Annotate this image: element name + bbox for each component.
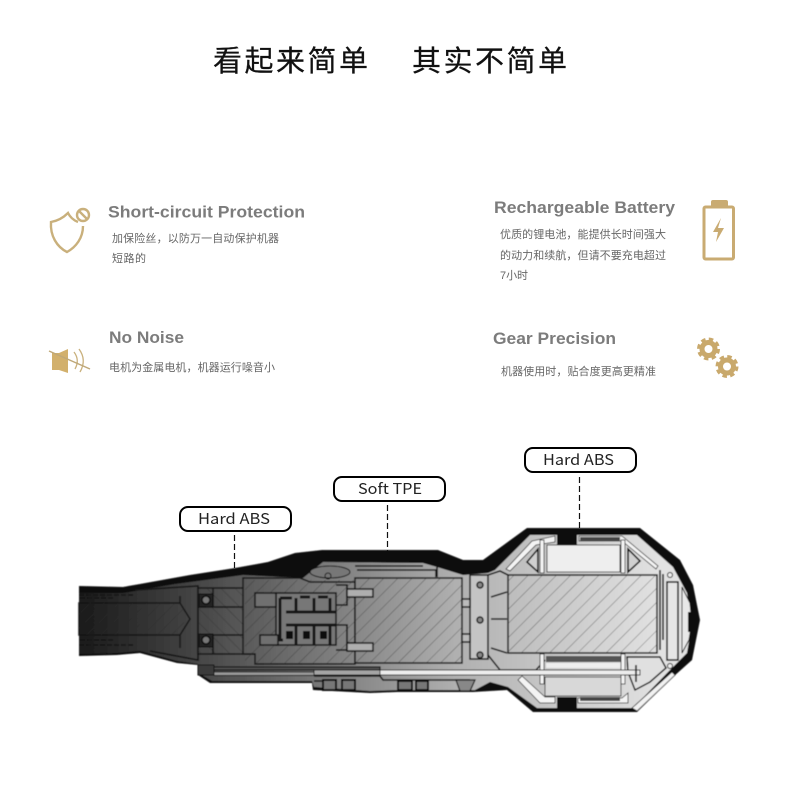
front shaft xyxy=(79,586,198,660)
heading: Rechargeable Battery xyxy=(494,198,676,217)
rear upper chamber xyxy=(506,535,658,573)
rear battery block xyxy=(508,575,657,653)
callout: hard ABS front: Hard ABS xyxy=(198,508,270,529)
outer black shell xyxy=(79,528,700,712)
description xyxy=(112,231,279,265)
description: 短路的 xyxy=(112,251,146,265)
description xyxy=(500,227,666,282)
callout: soft TPE: Soft TPE xyxy=(358,478,422,499)
motor block xyxy=(347,566,462,663)
middle column with screws xyxy=(462,571,545,670)
callout: hard ABS front xyxy=(180,507,291,568)
title: 其实不简单 xyxy=(412,45,567,78)
gear train xyxy=(255,593,336,645)
inner body xyxy=(79,535,692,708)
motor connector pins xyxy=(336,585,374,651)
gear housing xyxy=(243,566,355,664)
long drive rod and lower strip xyxy=(198,665,640,691)
description: 7小时 xyxy=(500,269,528,282)
icon: muted speaker xyxy=(49,349,90,373)
callout: hard ABS rear: Hard ABS xyxy=(543,449,614,470)
description: 加保险丝，以防万一自动保护机器 xyxy=(112,231,279,245)
feature: gear precision xyxy=(493,329,737,378)
description: 机器使用时，贴合度更高更精准 xyxy=(501,364,656,378)
heading: Short-circuit Protection xyxy=(108,202,305,222)
title: 看起来简单 xyxy=(213,45,368,78)
callout: soft TPE xyxy=(334,477,445,551)
heading: No Noise xyxy=(109,328,184,347)
cross-section diagram of the tool xyxy=(79,528,700,712)
rear lower chamber xyxy=(518,654,666,708)
feature: rechargeable battery xyxy=(494,198,734,282)
icon: battery xyxy=(704,200,734,259)
icon: shield xyxy=(51,209,89,252)
description: 电机为金属电机，机器运行噪音小 xyxy=(109,360,275,374)
heading: Gear Precision xyxy=(493,329,616,348)
icon: gears xyxy=(698,339,737,376)
callout: hard ABS rear xyxy=(525,448,636,528)
rear end cap xyxy=(632,570,694,711)
feature: no noise xyxy=(49,328,275,374)
feature: short-circuit protection xyxy=(51,202,305,265)
description: 的动力和续航，但请不要充电超过 xyxy=(500,248,666,262)
title xyxy=(213,45,567,78)
front spindle block xyxy=(198,588,275,654)
description: 优质的锂电池，能提供长时间强大 xyxy=(500,227,666,241)
